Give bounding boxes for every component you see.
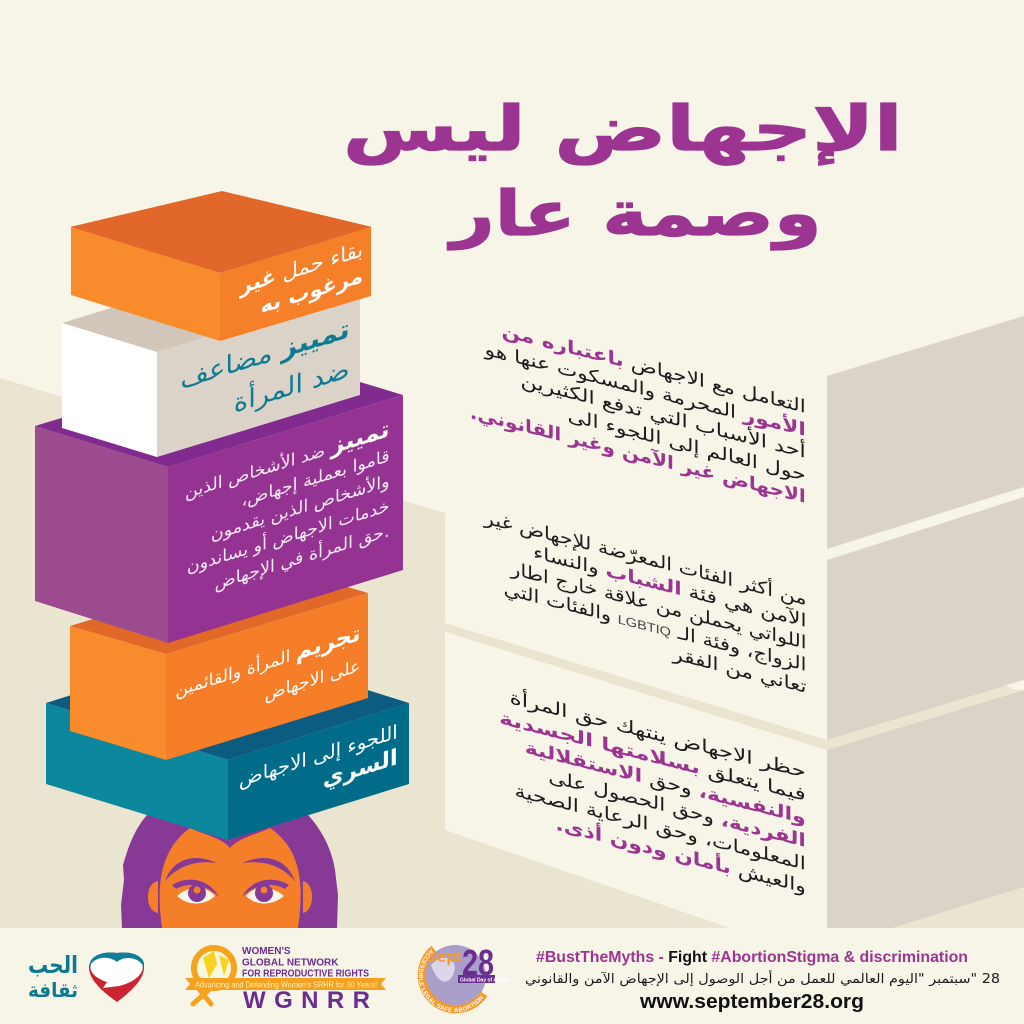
text block: rights: المعلومات، وحق الرعاية الصحية <box>515 780 806 875</box>
logo: culture of love: ثقافة <box>28 978 78 1002</box>
block label: discrimination: .حق المرأة في الإجهاض <box>215 521 390 594</box>
footer slogan: #BustTheMyths - Fight #AbortionStigma & discrimination <box>536 949 968 966</box>
title: وصمة عار <box>451 177 822 250</box>
text block: rights: فيما يتعلق بسلامتها الجسدية <box>499 707 806 806</box>
background: beige floor and panels <box>0 378 1024 928</box>
logo: WGNRR <box>185 946 386 1014</box>
text block: stigma: الاجهاض غير الآمن وغير القانوني. <box>470 402 806 508</box>
panel: right side faces <box>827 316 1024 928</box>
logo: culture of love <box>28 951 144 1002</box>
block: purple <box>35 355 403 643</box>
text block: affected groups: اللواتي يحملن من علاقة خارج اطار <box>510 558 806 654</box>
block: orange top <box>70 191 372 341</box>
text block: affected groups: من أكثر الفئات المعرّضة للإجهاض غير <box>483 507 806 610</box>
logo: september 28 <box>418 942 509 1014</box>
text block: stigma: حول العالم إلى اللجوء الى <box>568 404 806 486</box>
logo: september 28: ACCESSIBLE LEGAL SAFE ABORTION <box>418 949 484 1012</box>
text block: affected groups: الزواج، وفئة الـ LGBTIQ والفئات التي <box>503 578 806 676</box>
logo: WGNRR: WOMEN'S <box>242 946 291 957</box>
text block: rights: والنفسية، وحق الاستقلالية <box>525 737 806 829</box>
text block: stigma: التعامل مع الاجهاض باعتباره من <box>502 320 806 418</box>
block: white and stone <box>62 262 360 457</box>
title: الإجهاض ليس <box>344 92 903 165</box>
illustration: woman's head <box>121 815 338 928</box>
block label: discrimination <box>185 416 390 594</box>
block: orange lower <box>70 565 368 760</box>
text block: affected groups: تعاني من الفقر <box>672 643 806 698</box>
logo: WGNRR: GLOBAL NETWORK <box>242 958 339 968</box>
logo: september 28: sept <box>428 947 462 966</box>
block label: unwanted pregnancy: مرغوب به <box>260 263 363 318</box>
block label: double discrimination: تمييز مضاعف <box>181 314 350 396</box>
logo: WGNRR: WGNRR <box>243 987 370 1014</box>
block: teal <box>46 646 409 840</box>
text block: rights: حظر الاجهاض ينتهك حق المرأة <box>510 687 806 783</box>
text block: rights: الفردية، وحق الحصول على <box>548 766 806 852</box>
logo: WGNRR: FOR REPRODUCTIVE RIGHTS <box>242 968 369 980</box>
footer arabic line: 28 "سبتمبر "اليوم العالمي للعمل من أجل الوصول إلى الإجهاض الآمن والقانوني <box>525 970 1000 987</box>
block label: criminalisation: تجريم المرأة والقائمين <box>175 621 360 702</box>
block label: secret abortion: السري <box>323 745 398 793</box>
text block: stigma: الأمور المحرمة والمسكوت عنها هو <box>485 338 806 440</box>
block label: discrimination: والأشخاص الذين يقدمون <box>211 471 390 546</box>
block label: discrimination: قاموا بعملية إجهاض، <box>242 446 390 511</box>
text block: affected groups: الآمن هي فئة الشباب والنساء <box>533 542 806 632</box>
title <box>344 92 903 251</box>
logo: WGNRR: Advancing and Defending Women's SRHR for 30 Years! <box>195 980 377 990</box>
block label: discrimination: تمييز ضد الأشخاص الذين <box>185 416 390 504</box>
footer website: www.september28.org <box>639 991 864 1013</box>
logo: september 28: 28 <box>462 942 494 983</box>
text block: rights: والعيش بأمان ودون أذى. <box>556 814 806 898</box>
block label: criminalisation: على الاجهاض <box>264 656 360 705</box>
text block: affected groups <box>483 507 806 698</box>
text block: rights <box>499 687 806 898</box>
logo: september 28: Global Day of Action <box>460 978 509 984</box>
block label: discrimination: خدمات الاجهاض أو يساندون <box>187 496 390 578</box>
block label: unwanted pregnancy: بقاء حمل غير <box>240 237 363 299</box>
block label: double discrimination: ضد المرأة <box>234 354 350 419</box>
text block: stigma: أحد الأسباب التي تدفع الكثيرين <box>521 370 806 463</box>
block label: secret abortion: اللجوء إلى الاجهاض <box>239 721 398 792</box>
logo: culture of love: الحب <box>28 951 78 979</box>
text block: stigma <box>470 320 806 508</box>
